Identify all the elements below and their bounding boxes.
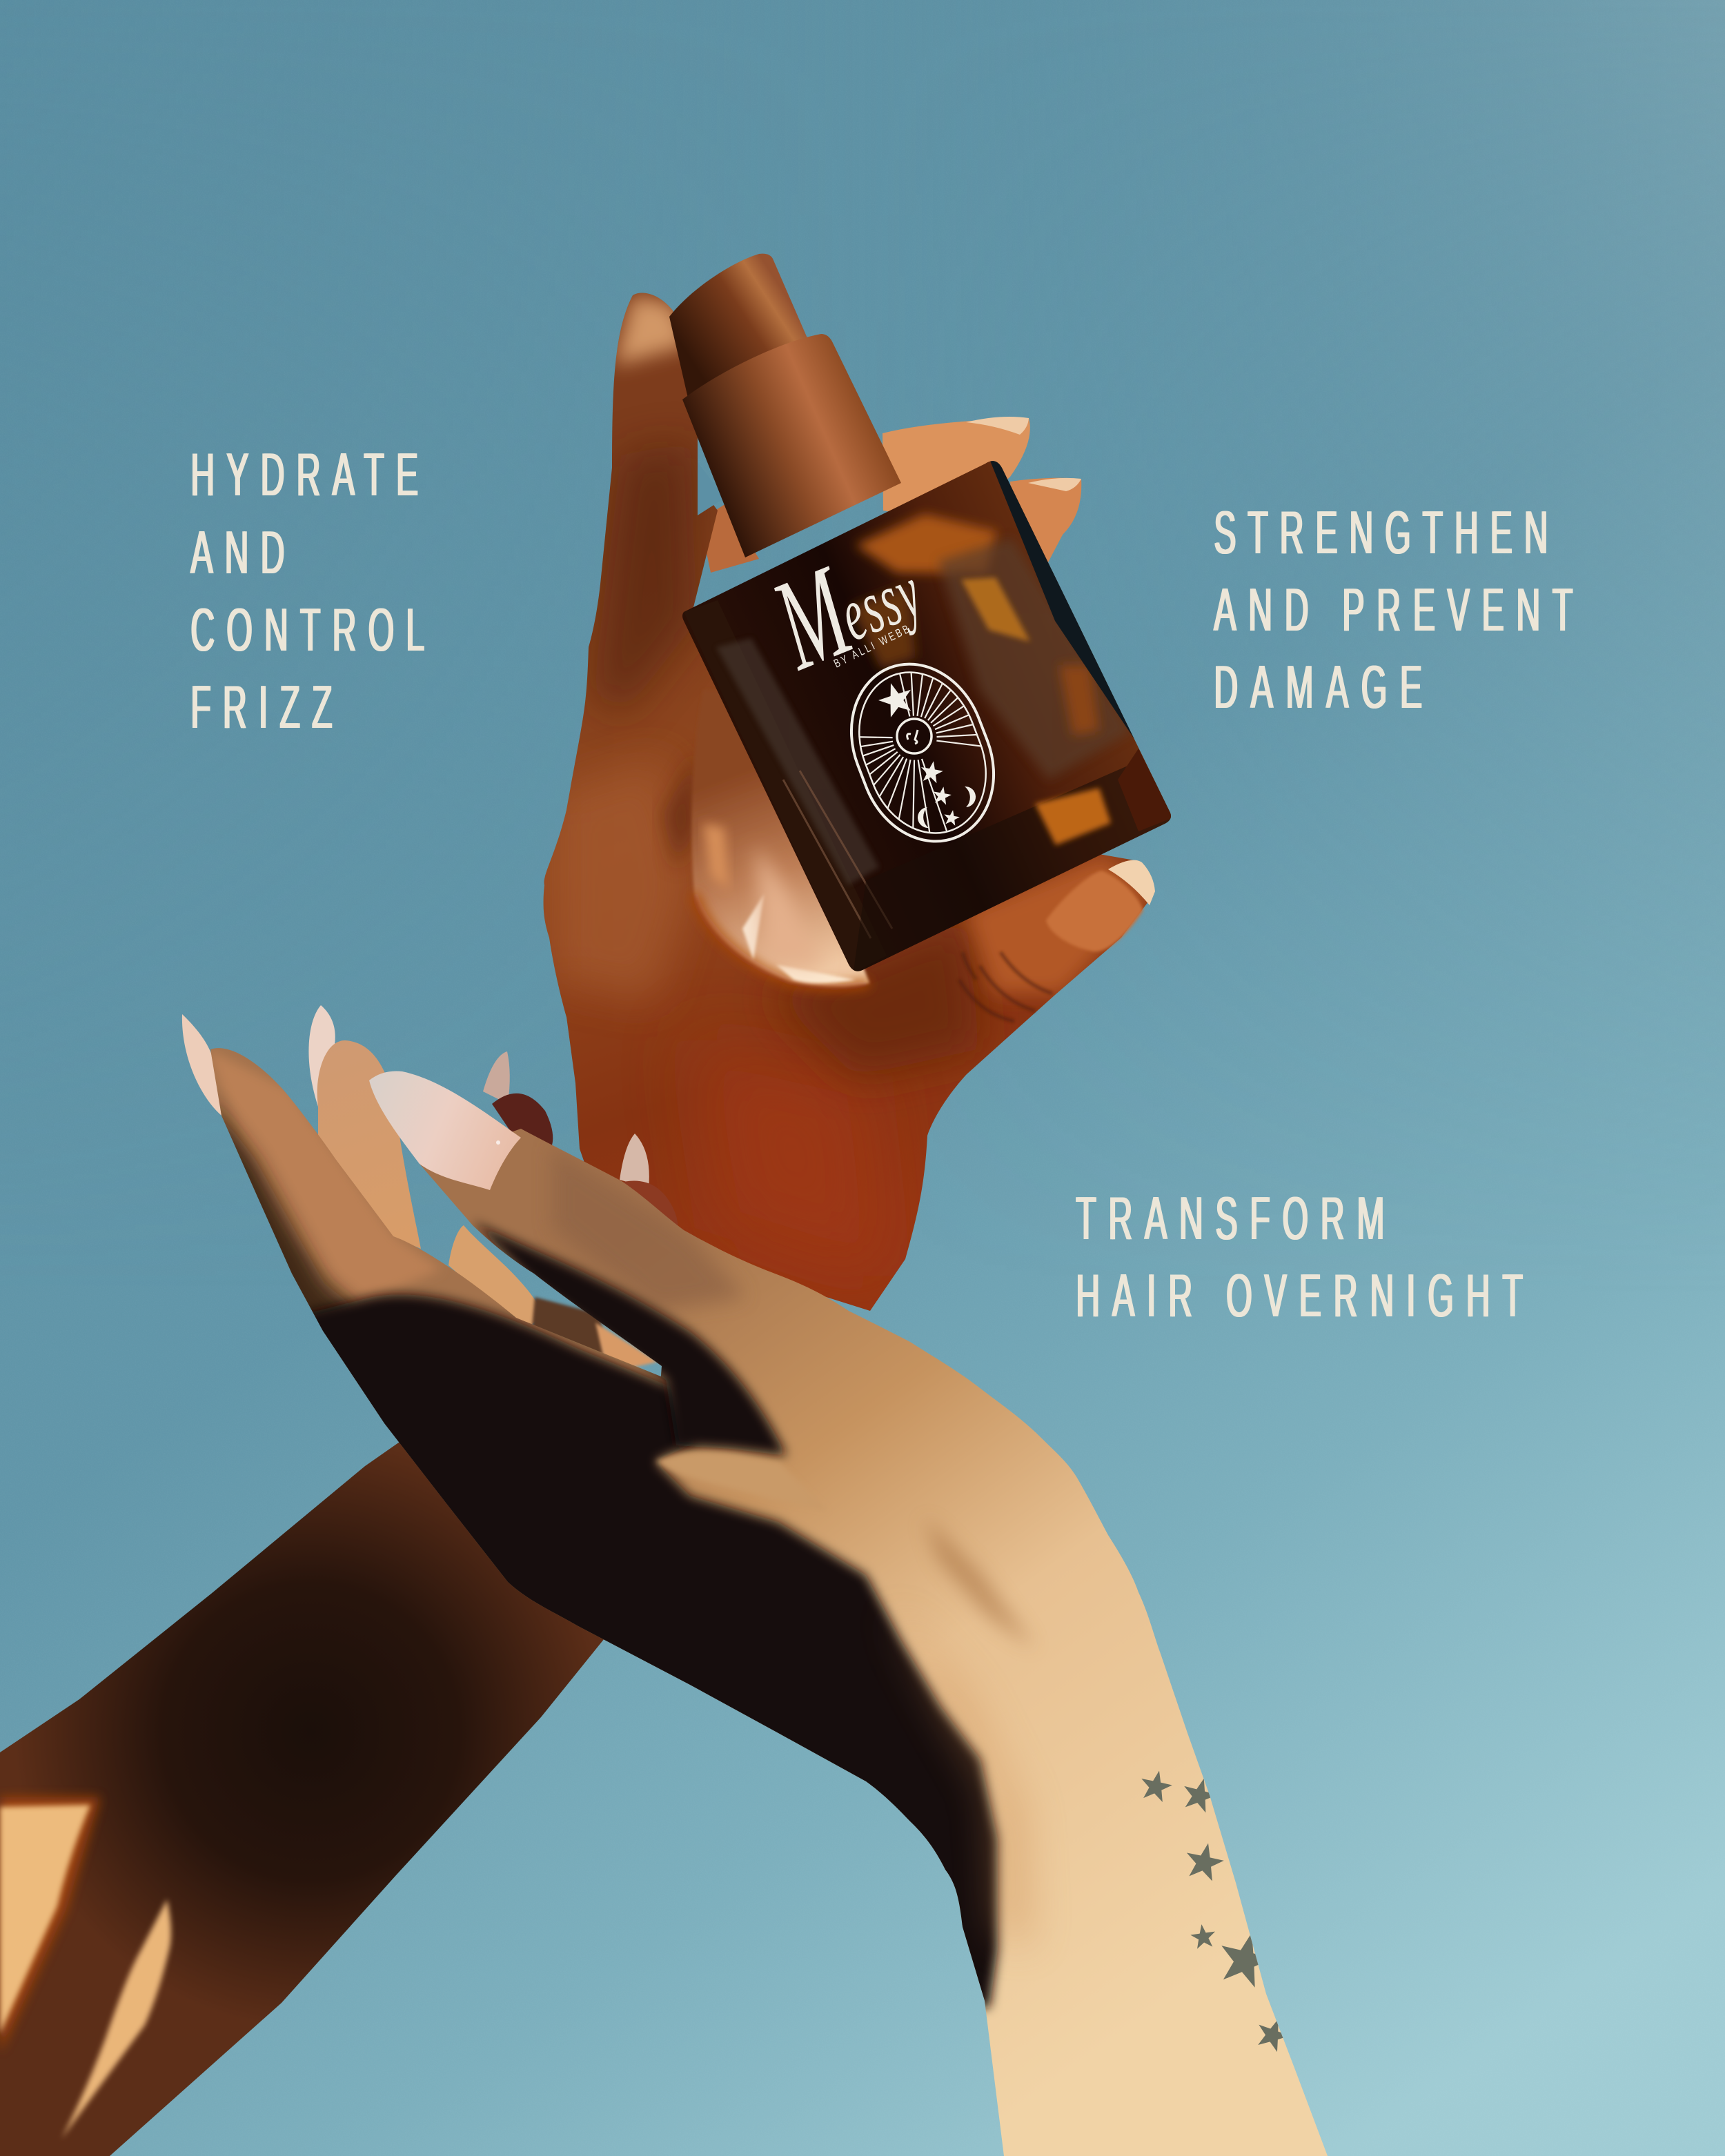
back forearm in shadow xyxy=(0,1421,607,2156)
second sun patch on forearm xyxy=(61,1899,171,2139)
palm rim xyxy=(694,893,869,987)
text: hydrate and control frizz: HYDRATE xyxy=(190,440,429,508)
thumb light xyxy=(966,856,1152,993)
upper hand holding the bottle xyxy=(544,293,1155,1311)
medallion logo xyxy=(764,588,1066,889)
brand wordmark: essy xyxy=(828,550,933,657)
text: hydrate and control frizz: FRIZZ xyxy=(190,672,343,741)
text: strengthen and prevent damage xyxy=(1213,500,1582,714)
middle finger behind bottle xyxy=(883,418,1030,524)
side of hand glow xyxy=(552,759,690,1000)
base band xyxy=(853,759,1173,976)
window reflection xyxy=(961,577,1030,642)
wrist red glow xyxy=(690,1035,890,1283)
finger behind palm xyxy=(448,1225,543,1332)
finger nails on middle and ring fingers xyxy=(966,417,1081,491)
shading on upper hand xyxy=(552,295,1152,1283)
translucent right panel xyxy=(938,538,1132,780)
shadow wedge under front finger xyxy=(473,1221,787,1456)
glass streak xyxy=(783,771,892,938)
warm shade beside the shadow xyxy=(890,1608,1028,1946)
stripe behind logo xyxy=(851,584,916,669)
knuckle creases xyxy=(959,952,1052,1021)
upper star xyxy=(874,678,917,720)
thumb pad xyxy=(1046,871,1143,951)
dark under thumb xyxy=(773,918,980,1076)
fingernails and fingertips of upper hand behind the front hand xyxy=(483,1051,678,1235)
finger one tone xyxy=(207,1049,442,1304)
text: transform hair overnight: HAIR OVERNIGHT xyxy=(1075,1261,1535,1329)
second finger xyxy=(317,1040,421,1249)
brand wordmark xyxy=(754,510,940,698)
lit strip across the shadow xyxy=(656,1452,828,1511)
palm seen through the gap xyxy=(691,690,869,987)
hand silhouette xyxy=(544,293,1154,1311)
sky gap between index finger and collar xyxy=(698,462,724,515)
bottle xyxy=(662,254,1187,993)
thumb nail xyxy=(1108,860,1155,905)
knuckle tone xyxy=(552,1145,745,1311)
medallion outer ring xyxy=(829,644,1016,861)
text: hydrate and control frizz: AND xyxy=(190,517,295,586)
base amber reflection xyxy=(1035,788,1111,845)
first fingernail xyxy=(182,1014,221,1116)
collar xyxy=(682,334,901,557)
index finger shadow xyxy=(593,442,697,718)
crescent moons xyxy=(918,787,976,828)
brand wordmark: BY ALLI WEBB xyxy=(832,622,914,671)
finger edge shadow xyxy=(207,1097,359,1359)
pump cap xyxy=(669,254,807,407)
fingertip light xyxy=(614,295,690,366)
fingers of the front hand behind the palm xyxy=(182,1005,658,1373)
text: strengthen and prevent damage: AND PREVENT xyxy=(1213,575,1584,643)
glass body xyxy=(662,442,1187,993)
text: strengthen and prevent damage: STRENGTHEN xyxy=(1213,498,1559,566)
brand wordmark: M xyxy=(756,538,870,698)
sun face xyxy=(897,719,931,753)
shaded finger piece xyxy=(531,1297,607,1369)
left glass band xyxy=(684,600,887,973)
right dark edge xyxy=(990,455,1173,818)
front fingernail xyxy=(369,1071,521,1190)
tendon shading xyxy=(925,1518,1035,1649)
text: strengthen and prevent damage: DAMAGE xyxy=(1213,653,1434,720)
shoulder reflection xyxy=(856,514,997,573)
nail gloss xyxy=(496,1140,500,1145)
medallion inner ring and rays xyxy=(764,588,1066,889)
second fingernail xyxy=(308,1005,335,1107)
front hand and wrist xyxy=(172,1000,1359,2156)
vertical amber reflection xyxy=(1059,665,1099,735)
orange shadow rim xyxy=(0,1797,100,2053)
palm crease xyxy=(662,752,697,869)
sun patch on forearm xyxy=(0,1805,90,2034)
text: hydrate and control frizz: CONTROL xyxy=(190,595,435,664)
star tattoos on wrist xyxy=(1138,1768,1294,2054)
text: transform hair overnight xyxy=(1075,1187,1532,1321)
palm shadow xyxy=(304,1294,998,2008)
ring finger behind bottle xyxy=(1010,478,1081,564)
palm highlights xyxy=(703,823,856,983)
text: hydrate and control frizz xyxy=(190,440,435,741)
lower finger behind bottle xyxy=(700,504,759,573)
small tan finger xyxy=(595,1323,658,1373)
text: transform hair overnight: TRANSFORM xyxy=(1075,1184,1396,1252)
lower stars xyxy=(919,759,960,827)
grey glass stripe xyxy=(716,638,879,885)
